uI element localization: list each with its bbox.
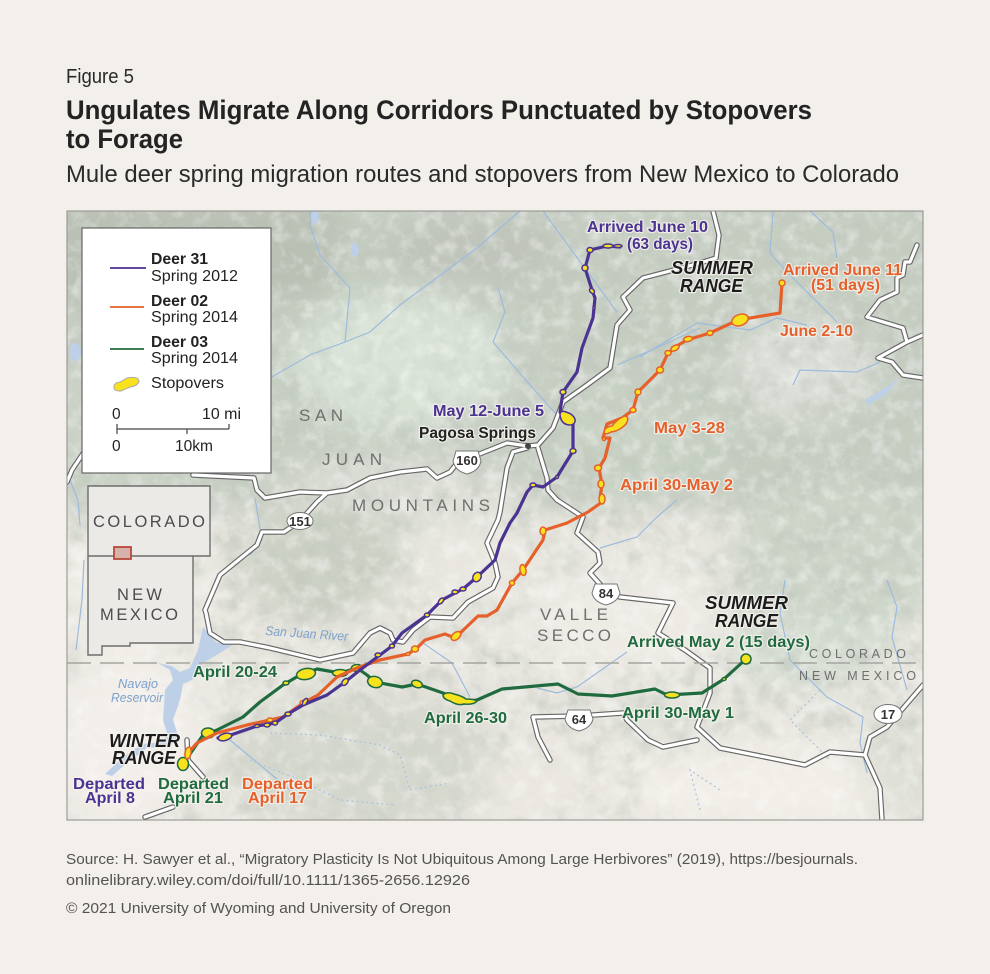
Deer 03 labels bbox=[193, 634, 810, 727]
Deer 31 labels: Arrived June 10 bbox=[587, 219, 708, 236]
place labels: SECCO bbox=[537, 626, 611, 645]
Deer 02 labels: Arrived June 11 bbox=[783, 262, 902, 279]
highway shields bbox=[287, 451, 902, 731]
water labels bbox=[111, 623, 349, 705]
legend bbox=[82, 228, 271, 473]
place labels: MOUNTAINS bbox=[352, 496, 490, 515]
inset locator map: MEXICO bbox=[100, 606, 178, 624]
legend: scale bar: 10 mi bbox=[202, 406, 241, 423]
Navajo Reservoir lake bbox=[105, 627, 237, 776]
Deer 03 labels: April 26-30 bbox=[424, 710, 507, 727]
panel: map bbox=[68, 212, 922, 820]
legend: stopovers bbox=[113, 376, 224, 392]
Pagosa Springs label: Pagosa Springs bbox=[419, 425, 536, 442]
region label: summer range south: SUMMER bbox=[705, 592, 789, 613]
legend: Deer 31 bbox=[110, 251, 238, 285]
legend: Deer 02: Deer 02 bbox=[151, 293, 208, 310]
Deer 02 labels: April 30-May 2 bbox=[620, 477, 733, 494]
inset locator map: NEW bbox=[117, 586, 162, 604]
departure labels: Departed bbox=[73, 776, 145, 793]
legend: Deer 03 bbox=[110, 334, 238, 367]
source note: onlinelibrary.wiley.com/doi/full/10.1111/1365-2656.12926 bbox=[66, 872, 470, 889]
legend: Deer 31: Deer 31 bbox=[151, 251, 208, 268]
title: to Forage bbox=[66, 124, 183, 154]
legend: Deer 03: Deer 03 bbox=[151, 334, 208, 351]
legend: Deer 02: Spring 2014 bbox=[151, 309, 238, 326]
copyright: © 2021 University of Wyoming and University of Oregon bbox=[66, 900, 451, 917]
highway shields: 17 bbox=[881, 707, 895, 722]
region label: winter range: RANGE bbox=[112, 747, 177, 768]
Deer 03 labels: April 20-24 bbox=[193, 664, 277, 681]
place labels bbox=[299, 406, 916, 683]
title: Ungulates Migrate Along Corridors Punctuated by Stopovers bbox=[66, 95, 812, 125]
departure labels: Departed bbox=[242, 776, 313, 793]
region label: summer range north bbox=[670, 260, 754, 294]
Deer 03 labels: April 30-May 1 bbox=[622, 705, 734, 722]
departure labels: Departed bbox=[158, 776, 229, 793]
region label: summer range south: RANGE bbox=[715, 610, 779, 631]
source note: Source: H. Sawyer et al., “Migratory Plasticity Is Not Ubiquitous Among Large Herbivores” (2019), https://besjournals. bbox=[66, 851, 858, 868]
rivers and lakes bbox=[69, 210, 907, 810]
legend: stopovers: Stopovers bbox=[151, 375, 224, 392]
Deer 31 labels: May 12-June 5 bbox=[433, 403, 544, 420]
route: Deer 03 green bbox=[178, 654, 751, 770]
water labels: Navajo bbox=[118, 676, 158, 691]
departure labels: April 17 bbox=[248, 790, 307, 807]
Deer 02 labels: June 2-10 bbox=[780, 323, 853, 340]
region label: summer range north: SUMMER bbox=[671, 257, 754, 278]
state boundary dashed line bbox=[67, 662, 923, 664]
place labels: COLORADO bbox=[809, 647, 906, 661]
departure labels: April 21 bbox=[163, 790, 223, 807]
legend: scale bar: 0 bbox=[112, 438, 121, 455]
Deer 02 labels: May 3-28 bbox=[654, 420, 725, 437]
highway shields: 84 bbox=[599, 586, 614, 601]
inset locator map bbox=[88, 486, 210, 655]
region label: winter range: WINTER bbox=[109, 730, 181, 751]
figure label: Figure 5 bbox=[66, 66, 134, 88]
departure labels: April 8 bbox=[85, 790, 135, 807]
water labels: San Juan River bbox=[265, 623, 349, 644]
legend: Deer 02 bbox=[110, 293, 238, 326]
subtitle: Mule deer spring migration routes and stopovers from New Mexico to Colorado bbox=[66, 161, 899, 188]
legend: Deer 03: Spring 2014 bbox=[151, 350, 238, 367]
map frame bbox=[67, 211, 923, 820]
source note bbox=[66, 851, 858, 889]
region label: summer range north: RANGE bbox=[680, 275, 744, 296]
Pagosa Springs marker bbox=[525, 443, 531, 449]
title bbox=[66, 95, 812, 154]
route: Deer 31 purple bbox=[217, 244, 622, 742]
Deer 31 labels bbox=[433, 219, 708, 420]
water labels: Reservoir bbox=[111, 690, 164, 705]
place labels: NEW MEXICO bbox=[799, 669, 916, 683]
roads bbox=[67, 211, 923, 820]
Deer 02 labels bbox=[620, 262, 902, 494]
Deer 02 labels: (51 days) bbox=[811, 277, 880, 294]
place labels: SAN bbox=[299, 406, 343, 425]
inset locator map: COLORADO bbox=[93, 513, 205, 531]
region label: summer range south bbox=[704, 594, 790, 628]
highway shields: 151 bbox=[289, 514, 311, 529]
place labels: JUAN bbox=[322, 450, 382, 469]
Deer 03 labels: Arrived May 2 (15 days) bbox=[627, 634, 810, 651]
legend: Deer 31: Spring 2012 bbox=[151, 268, 238, 285]
legend: scale bar: 0 bbox=[112, 406, 121, 423]
departure labels bbox=[73, 776, 313, 807]
place labels: VALLE bbox=[540, 605, 608, 624]
highway shields: 160 bbox=[456, 453, 478, 468]
route: Deer 02 orange bbox=[184, 280, 785, 759]
highway shields: 64 bbox=[572, 712, 587, 727]
region label: winter range bbox=[110, 732, 180, 766]
legend: scale bar bbox=[112, 408, 240, 451]
Deer 31 labels: (63 days) bbox=[627, 236, 693, 253]
terrain base map bbox=[68, 212, 922, 820]
legend: scale bar: 10km bbox=[175, 438, 213, 455]
